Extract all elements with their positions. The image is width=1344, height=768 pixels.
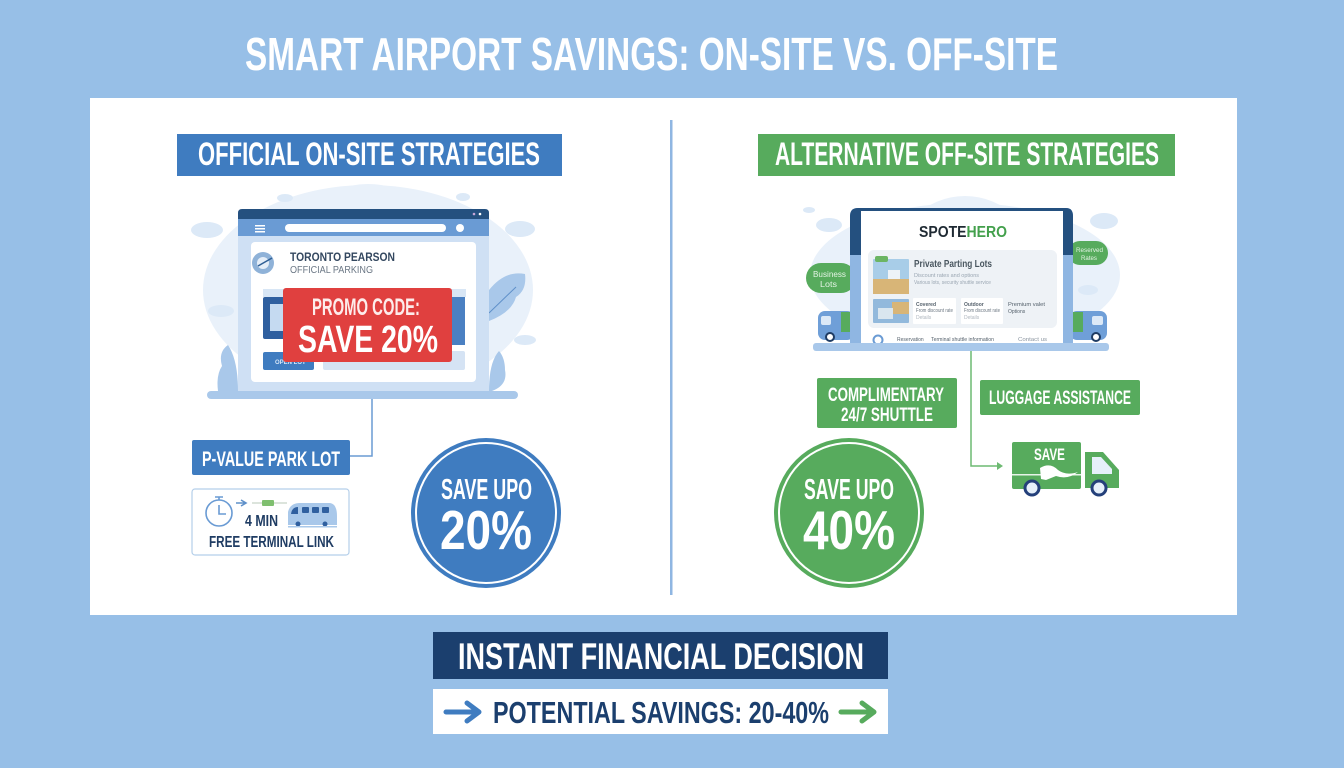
banner: instant financial decision: INSTANT FINANCIAL DECISION [458,636,864,677]
info box: free terminal link: 4 MIN [245,513,278,530]
heading: off-site strategies [758,134,1175,176]
callout: right bubble: Reserved [1076,247,1103,254]
callout: promo code [283,288,452,362]
card: private parking lots: Covered [916,302,936,308]
illustration: SpotHero tablet [803,196,1120,351]
icon: leaves [218,273,525,391]
image: lot photo [873,256,909,294]
card: private parking lots: Options [1008,309,1026,315]
footer of tablet: Contact us [1018,337,1048,343]
callout: promo code: SAVE 20% [298,319,438,361]
label: P-value park lot: P-VALUE PARK LOT [202,448,340,471]
arrow: green [841,703,874,721]
banner: potential savings: POTENTIAL SAVINGS: 20-40% [493,695,829,730]
info box: free terminal link [192,489,349,555]
footer of tablet [874,336,1048,344]
card: private parking lots: Details [916,315,932,321]
icon: save truck [1012,442,1119,495]
icon: route arrow [236,500,287,506]
button [263,352,314,370]
heading: on-site strategies [177,134,562,176]
card: private parking lots [868,250,1057,328]
button: OPEN LOT [275,360,306,366]
card: private parking lots: Outdoor [964,302,984,308]
arrow: blue [446,703,479,721]
card: private parking lots: Private Parting Lots [914,259,992,270]
callout: left bubble [806,263,856,293]
footer of tablet: Terminal shuttle information [931,337,994,343]
label: P-value park lot [192,440,350,475]
illustration: official parking website [191,184,536,399]
label: luggage assistance [980,380,1140,415]
browser window [238,209,489,391]
title: SMART AIRPORT SAVINGS: ON-SITE VS. OFF-SITE [245,28,1058,80]
label: complimentary shuttle [817,378,957,428]
callout: right bubble: Rates [1081,255,1098,262]
badge: save 20% [411,438,561,588]
logo: SpotHero: SPOTEHERO [919,224,1007,241]
connector: site to value lot [350,399,372,456]
label: complimentary shuttle: 24/7 SHUTTLE [841,405,933,426]
footer of tablet: Reservation [897,337,924,343]
label: luggage assistance: LUGGAGE ASSISTANCE [989,388,1131,409]
callout: right bubble [1068,241,1108,265]
connector: app to truck [971,351,1003,470]
tablet body [850,208,1073,343]
callout: promo code: PROMO CODE: [312,294,420,321]
badge: save 40%: SAVE UPO [804,474,894,506]
image: lot thumbnail [873,299,909,323]
panel: comparison [90,98,1237,615]
text: Toronto Pearson official parking: OFFICIAL PARKING [290,264,373,276]
text: Toronto Pearson official parking [290,252,395,276]
card: private parking lots: Various lots, security shuttle service [914,280,991,286]
card: private parking lots: Premium valet [1008,302,1046,308]
icon: pearson logo [252,252,274,274]
icon: bus [288,503,337,528]
badge: save 20%: 20% [440,499,532,561]
icon: right shuttle [1070,311,1107,341]
banner: instant financial decision [433,632,888,679]
icon: left shuttle [818,311,854,341]
banner: potential savings [433,689,888,734]
icon: save truck: SAVE [1034,445,1065,464]
badge: save 40%: 40% [803,499,895,561]
card: private parking lots: From discount rate [964,308,1000,314]
card: private parking lots: Details [964,315,980,321]
icon: stopwatch [206,497,232,526]
heading: off-site strategies: ALTERNATIVE OFF-SITE STRATEGIES [775,136,1159,172]
card: private parking lots: From discount rate [916,308,953,314]
badge: save 40% [774,438,924,588]
callout: left bubble: Business [813,269,846,279]
label: complimentary shuttle: COMPLIMENTARY [828,385,944,406]
badge: save 20%: SAVE UPO [441,474,532,506]
card: private parking lots: Discount rates and options [914,273,979,279]
info box: free terminal link: FREE TERMINAL LINK [209,534,334,551]
callout: left bubble: Lots [820,279,837,289]
text: Toronto Pearson official parking: TORONTO PEARSON [290,252,395,264]
heading: on-site strategies: OFFICIAL ON-SITE STRATEGIES [198,136,540,172]
